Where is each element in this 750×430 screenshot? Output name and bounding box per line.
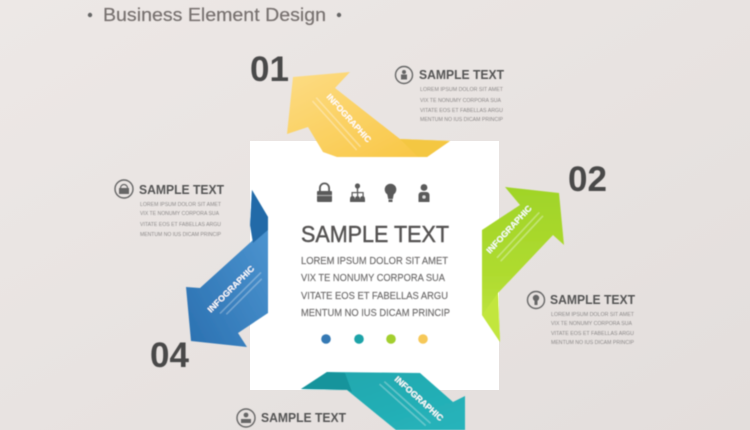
number 01: 01 — [250, 50, 289, 89]
callout: right: MENTUM NO IUS DICAM PRINCIP — [551, 340, 635, 346]
callout: right: VITATE EOS ET FABELLAS ARGU — [551, 331, 634, 337]
icon: person — [418, 184, 430, 202]
arrow label — [379, 369, 445, 430]
callout: left: SAMPLE TEXT — [139, 183, 224, 197]
number 02: 02 — [568, 160, 607, 199]
callout: top right: SAMPLE TEXT — [419, 68, 504, 82]
center white panel — [250, 141, 499, 390]
color dots — [321, 334, 428, 344]
callout: right: VIX TE NONUMY CORPORA SUA — [551, 321, 633, 327]
icon: lock badge — [115, 180, 133, 198]
arrow: yellow 01 — [287, 72, 450, 157]
callout: top right: MENTUM NO IUS DICAM PRINCIP — [420, 117, 504, 123]
center paragraph: LOREM IPSUM DOLOR SIT AMET — [301, 255, 449, 267]
arrow label: INFOGRAPHIC — [393, 374, 445, 423]
callout: left: VIX TE NONUMY CORPORA SUA — [140, 211, 220, 217]
callout: top right: LOREM IPSUM DOLOR SIT AMET — [420, 87, 503, 93]
arrow: teal 03 — [301, 369, 465, 430]
arrow label: INFOGRAPHIC — [325, 92, 373, 144]
icon: person badge — [237, 409, 255, 427]
center icons — [317, 183, 430, 202]
center paragraph: MENTUM NO IUS DICAM PRINCIP — [301, 307, 450, 319]
center paragraph: VITATE EOS ET FABELLAS ARGU — [301, 290, 448, 302]
icon: hierarchy — [350, 183, 365, 202]
callout: right — [528, 292, 635, 346]
arrow label — [205, 262, 265, 322]
callout: top right: VITATE EOS ET FABELLAS ARGU — [420, 108, 503, 114]
icon: person badge — [396, 66, 412, 84]
callout: left — [115, 180, 224, 238]
callout: left: MENTUM NO IUS DICAM PRINCIP — [140, 232, 222, 238]
icon: lock — [317, 183, 332, 202]
number 04: 04 — [150, 336, 189, 375]
callout: top right — [396, 66, 504, 123]
icon: lightbulb — [385, 184, 396, 202]
callout: bottom: SAMPLE TEXT — [261, 411, 346, 425]
arrow label — [312, 87, 373, 152]
arrow label — [484, 202, 543, 263]
center paragraph: VIX TE NONUMY CORPORA SUA — [301, 272, 445, 284]
arrow: green 02 — [482, 187, 564, 342]
arrow label: INFOGRAPHIC — [484, 203, 534, 255]
center heading: SAMPLE TEXT — [301, 221, 449, 247]
callout: bottom — [237, 409, 346, 427]
title: Business Element Design — [103, 4, 326, 25]
arrow label: INFOGRAPHIC — [205, 264, 256, 314]
callout: right: LOREM IPSUM DOLOR SIT AMET — [551, 312, 634, 318]
icon: bulb badge — [528, 292, 544, 308]
arrow: blue 04 — [186, 190, 268, 347]
callout: right: SAMPLE TEXT — [550, 293, 635, 307]
center paragraph — [301, 255, 450, 319]
callout: top right: VIX TE NONUMY CORPORA SUA — [420, 98, 502, 104]
callout: left: LOREM IPSUM DOLOR SIT AMET — [140, 202, 221, 208]
callout: left: VITATE EOS ET FABELLAS ARGU — [140, 222, 221, 228]
